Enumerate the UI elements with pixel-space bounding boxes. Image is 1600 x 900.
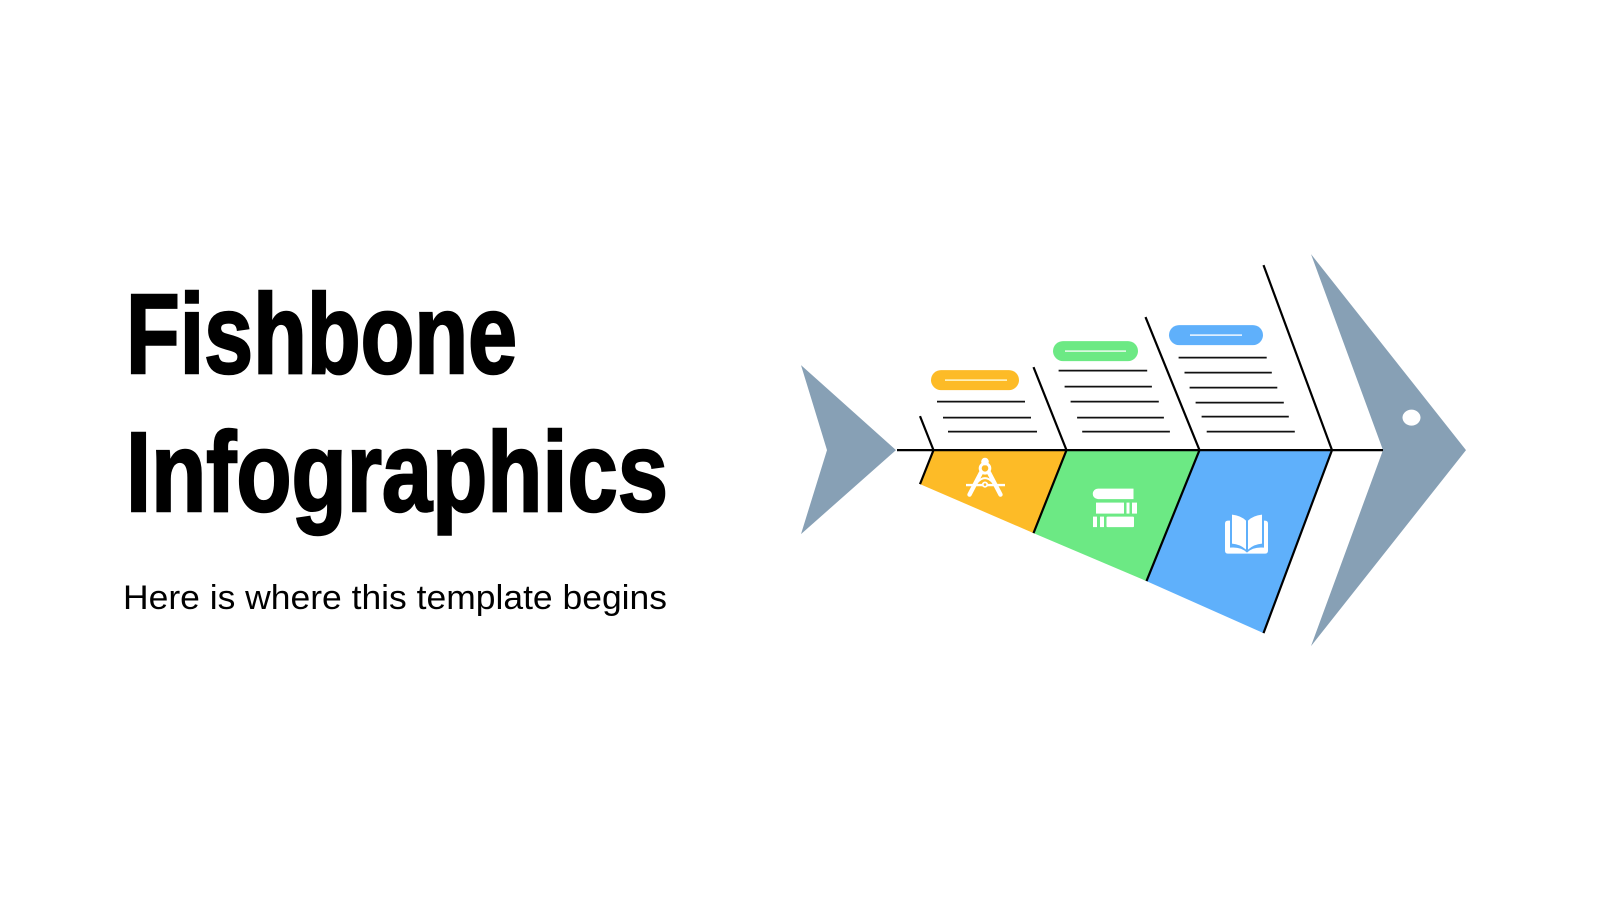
icon: compass bbox=[966, 458, 1005, 495]
text lines: yellow bbox=[937, 402, 1037, 432]
spine and ribs bbox=[897, 265, 1383, 633]
label pill: blue bbox=[1169, 325, 1263, 345]
title: Fishbone bbox=[126, 271, 517, 397]
fish eye bbox=[1402, 410, 1420, 426]
segment: green bbox=[1034, 450, 1200, 581]
title: Infographics bbox=[126, 409, 668, 535]
fish tail bbox=[801, 365, 896, 534]
text lines: green bbox=[1059, 371, 1170, 432]
segment: yellow bbox=[920, 450, 1066, 533]
label pill: green bbox=[1053, 341, 1138, 361]
fishbone diagram bbox=[801, 254, 1466, 646]
segment: blue bbox=[1146, 450, 1332, 633]
subtitle: Here is where this template begins bbox=[123, 579, 667, 617]
icon: books bbox=[1093, 489, 1137, 527]
fish head bbox=[1311, 254, 1466, 646]
title bbox=[126, 271, 668, 535]
icon: open book bbox=[1225, 515, 1268, 554]
label pill: yellow bbox=[931, 370, 1019, 390]
text lines: blue bbox=[1179, 358, 1295, 432]
